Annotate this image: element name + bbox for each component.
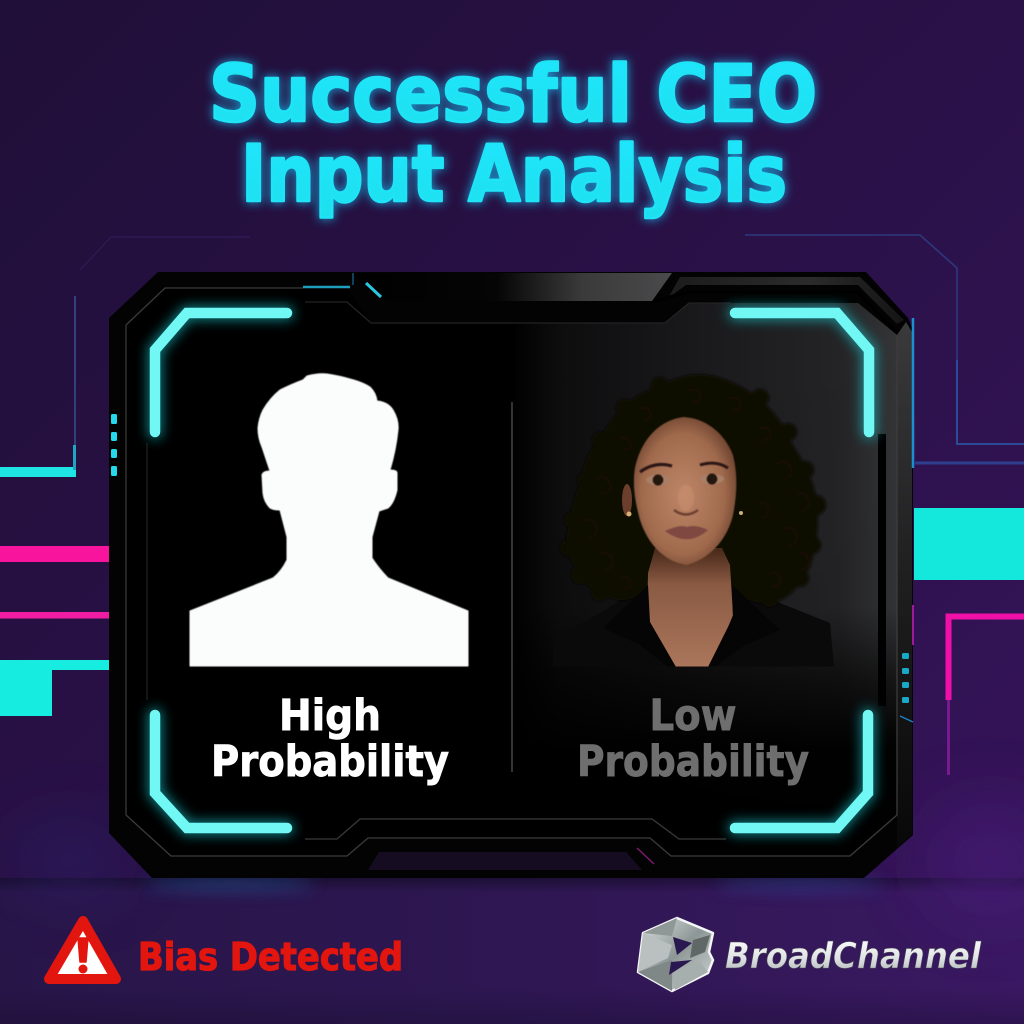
bias detected label: Bias Detected bbox=[138, 935, 403, 979]
panel body bbox=[109, 272, 913, 878]
portrait collar bbox=[638, 585, 746, 666]
side indicator lights bbox=[111, 414, 913, 722]
portrait neck and chest bbox=[647, 548, 733, 667]
icon: warning triangle bbox=[49, 921, 116, 979]
title: Successful CEO bbox=[209, 50, 817, 140]
panel top right band bbox=[668, 277, 904, 324]
panel right edge bevel bbox=[897, 322, 912, 848]
logo wordmark: BroadChannel bbox=[725, 936, 982, 977]
title: Successful CEO bbox=[209, 50, 817, 140]
label: low probability: Low bbox=[650, 691, 736, 741]
portrait eyes bbox=[640, 463, 728, 486]
title: Input Analysis bbox=[241, 130, 787, 220]
panel frame outlines bbox=[126, 288, 897, 856]
glowing corner brackets bbox=[155, 313, 869, 828]
portrait jacket bbox=[616, 590, 834, 666]
logo: BroadChannel bbox=[638, 918, 982, 991]
label: high probability bbox=[211, 691, 449, 787]
portrait hair bbox=[560, 374, 826, 607]
panel screen bbox=[548, 303, 897, 716]
portrait nose and lips bbox=[665, 485, 708, 539]
panel bottom tab bbox=[368, 848, 654, 870]
circuit lines left bbox=[0, 237, 250, 716]
title bbox=[209, 50, 817, 220]
logo cube icon bbox=[638, 918, 713, 991]
circuit lines right bbox=[745, 235, 1024, 775]
portrait face bbox=[634, 417, 736, 565]
label: low probability: Probability bbox=[577, 737, 809, 787]
panel top tab bbox=[303, 273, 672, 301]
panel: comparison frame bbox=[109, 272, 913, 878]
label: high probability: Probability bbox=[211, 737, 449, 787]
label: high probability: High bbox=[279, 691, 381, 741]
portrait earrings and ear bbox=[622, 484, 743, 516]
label: low probability bbox=[577, 691, 809, 787]
icon: portrait of a woman bbox=[553, 374, 834, 667]
title: Input Analysis bbox=[241, 130, 787, 220]
icon: white silhouette bbox=[190, 374, 468, 666]
center divider bbox=[511, 402, 513, 772]
